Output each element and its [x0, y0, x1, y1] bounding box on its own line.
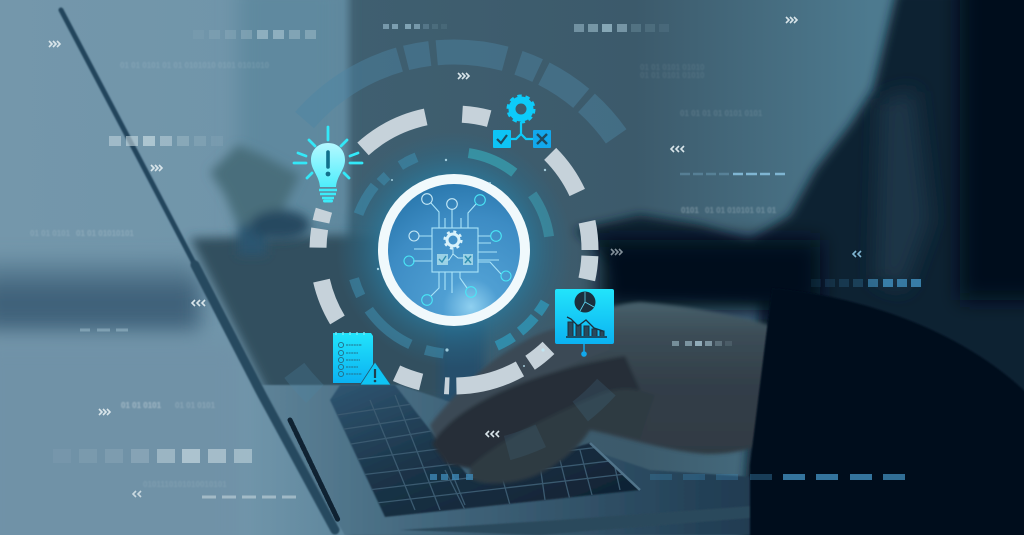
data strip: top-left squares: [193, 30, 316, 39]
white ring with disc: [383, 179, 525, 321]
middle finger: [432, 356, 640, 470]
blurred plant: [210, 145, 310, 255]
middle ring of teal segments: [306, 102, 602, 398]
faint outer ring of arc segments: [164, 0, 744, 535]
circuit traces and nodes: [404, 194, 511, 305]
data strip: small dashes: [80, 174, 785, 497]
data strip: mid-left squares: [109, 136, 223, 146]
data strip: top-centre squares: [383, 24, 447, 29]
data strip: bottom-left squares: [53, 449, 252, 463]
faint binary text: 01 01 01 01 0101 0101: [680, 109, 763, 118]
icon: gear with check and cross boxes: [493, 96, 551, 148]
laptop front edge: [400, 496, 890, 535]
central chip emblem: [383, 179, 525, 321]
icon: light bulb: [294, 127, 362, 202]
faint binary text: 01 01 010101 01 01: [705, 206, 777, 215]
back finger: [430, 322, 610, 442]
faint binary text: [30, 61, 777, 489]
chevron arrows: [49, 17, 861, 497]
icon: chart presentation card: [555, 289, 614, 357]
icon: checklist with warning triangle: [333, 332, 391, 385]
palm: [540, 302, 775, 454]
faint binary text: 01 01 0101: [175, 401, 216, 410]
data strip: bottom dashes: [430, 474, 905, 480]
faint binary text: 01 01 0101 01 01 0101010 0101 0101010: [120, 61, 270, 70]
faint binary text: 01 01 0101 01010: [640, 63, 705, 72]
central glow: [336, 132, 572, 368]
person silhouette: [575, 0, 1024, 535]
laptop deck: [252, 385, 1024, 535]
sparkle particles: [377, 159, 546, 367]
data strip: hand squares: [672, 341, 732, 346]
faint binary text: 01 01 0101 01010: [640, 71, 705, 80]
data strip: top-right squares: [574, 24, 669, 32]
sleeve: [750, 288, 1024, 535]
faint binary text: 0101: [681, 206, 699, 215]
chip gear and check boxes: [437, 232, 473, 265]
faint binary text: 01 01 0101: [121, 401, 162, 410]
faint binary text: 01 01 0101: [30, 229, 71, 238]
outer dashed white ring: [262, 58, 646, 442]
data strip: right squares: [811, 279, 921, 287]
front finger: [470, 389, 655, 483]
faint binary text: 0101110101010010101: [143, 480, 227, 489]
faint binary text: 01 01 01010101: [76, 229, 134, 238]
keyboard: [330, 385, 660, 517]
hand: [430, 302, 775, 483]
laptop screen hinge: [61, 10, 338, 530]
